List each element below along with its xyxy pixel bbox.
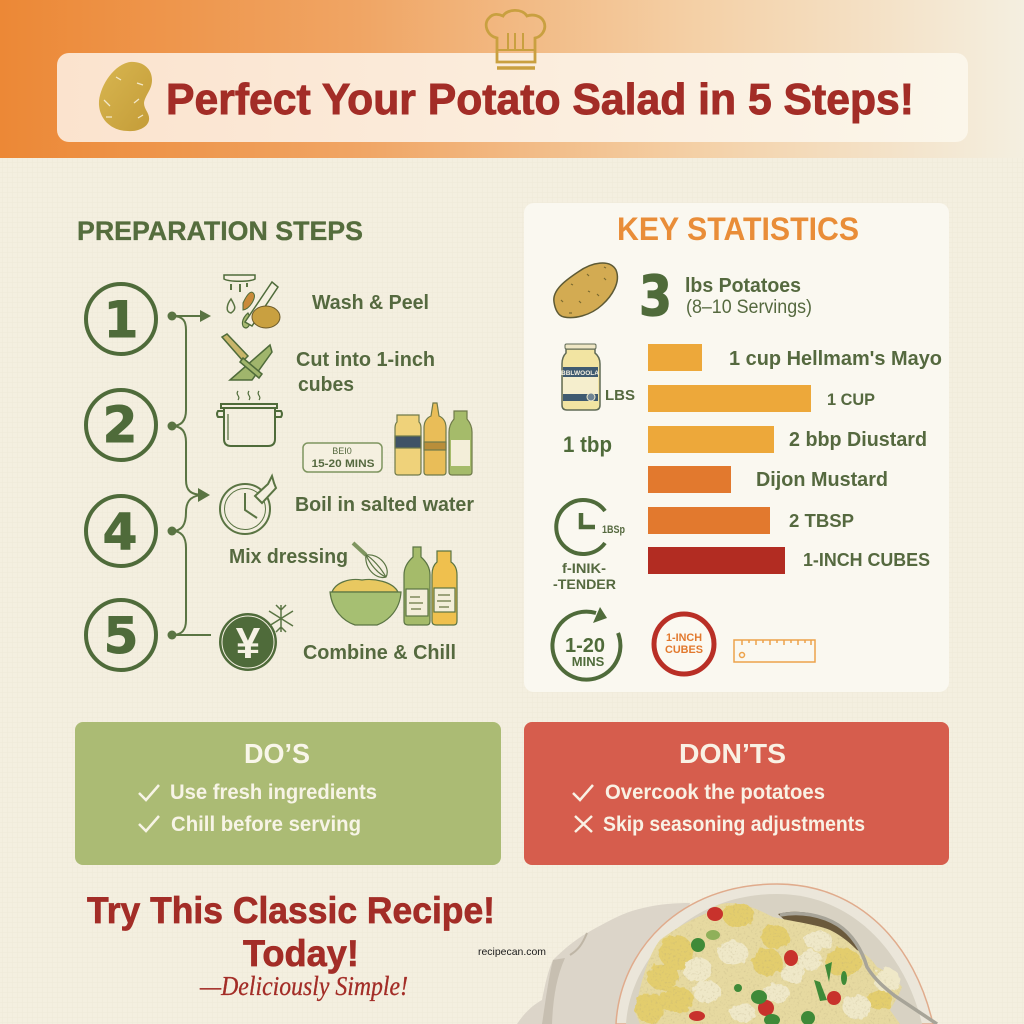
- step number 2: [86, 390, 156, 460]
- step number 1: [86, 284, 156, 354]
- spoon: [780, 913, 937, 1024]
- icon: chill: ¥: [236, 619, 261, 668]
- connector arrows: [168, 310, 211, 640]
- icon: chef hat: [486, 10, 545, 68]
- salad: [630, 900, 910, 1024]
- icon: timer: [220, 476, 276, 534]
- panel: key statistics: [524, 203, 949, 692]
- icon: cube size badge: 1-INCH: [666, 632, 702, 644]
- step number 1: 1: [104, 291, 138, 349]
- tagline: —Deliciously Simple!: [199, 971, 408, 1001]
- list: do's: Chill before serving: [171, 813, 361, 836]
- label: mix dressing: Mix dressing: [229, 546, 348, 568]
- list: do's: [139, 781, 377, 836]
- statistic: potatoes: 3: [639, 264, 672, 328]
- icon: time loop: [552, 607, 620, 680]
- bar chart: 1-INCH CUBES: [803, 550, 930, 570]
- statistic: potatoes: (8–10 Servings): [686, 297, 812, 318]
- list: don'ts: Skip seasoning adjustments: [603, 813, 865, 836]
- step number 5: 5: [104, 607, 138, 665]
- icon: chill: [219, 605, 293, 671]
- title banner: [57, 53, 968, 142]
- step number 4: [86, 496, 156, 566]
- label: cut into cubes: Cut into 1-inch: [296, 349, 435, 371]
- label: fork tender: f-INIK-: [562, 560, 606, 576]
- step number 2: 2: [103, 396, 137, 454]
- source credit: recipecan.com: [478, 946, 546, 958]
- badge: boil time: BEI0: [332, 446, 352, 456]
- label: 1 tbp: 1 tbp: [563, 432, 612, 457]
- bar chart: 2 TBSP: [789, 511, 854, 531]
- label: lbs: LBS: [605, 387, 635, 404]
- label: boil in salted water: Boil in salted water: [295, 494, 474, 516]
- icon: knife: [222, 334, 272, 380]
- icon: whole potato: [554, 263, 617, 318]
- call to action: [87, 890, 495, 974]
- header band: [0, 0, 1024, 158]
- list: do's: Use fresh ingredients: [170, 781, 377, 804]
- panel: preparation steps: [86, 275, 474, 671]
- call to action: Try This Classic Recipe!: [87, 890, 495, 931]
- label: wash and peel: Wash & Peel: [312, 292, 429, 314]
- label: combine and chill: Combine & Chill: [303, 642, 456, 664]
- bowl: [616, 884, 933, 1024]
- panel: do's: [75, 722, 501, 865]
- bar chart: Dijon Mustard: [756, 469, 888, 491]
- step number 5: [86, 600, 156, 670]
- heading: key statistics: KEY STATISTICS: [617, 211, 859, 247]
- statistic: potatoes: lbs Potatoes: [685, 275, 801, 297]
- icon: clock: [556, 500, 625, 554]
- icon: clock: 1BSp: [602, 524, 625, 536]
- badge: boil time: 15-20 MINS: [312, 458, 374, 470]
- call to action: Today!: [243, 933, 359, 974]
- icon: dressing jars: [395, 403, 472, 475]
- title: Perfect Your Potato Salad in 5 Steps!: [166, 75, 914, 124]
- icon: pot: [217, 391, 282, 446]
- icon: wash and peel: [224, 275, 280, 328]
- list: don'ts: Overcook the potatoes: [605, 781, 825, 804]
- icon: cube size badge: [654, 614, 714, 674]
- icon: mayo jar: [561, 344, 600, 410]
- step number 4: 4: [103, 503, 137, 561]
- label: fork tender: -TENDER: [553, 576, 616, 592]
- bar chart: 1 cup Hellmam's Mayo: [729, 348, 942, 370]
- statistic: potatoes: [639, 264, 812, 328]
- bar chart: [648, 344, 942, 574]
- label: cut into cubes: cubes: [298, 374, 354, 396]
- bar chart: 1 CUP: [827, 390, 875, 409]
- icon: potato: [99, 62, 152, 131]
- icon: cube size badge: CUBES: [665, 644, 703, 656]
- napkin: [517, 903, 690, 1024]
- heading: do's: DO’S: [244, 738, 310, 769]
- icon: time loop: 1-20: [565, 635, 605, 657]
- bar chart: 2 bbp Diustard: [789, 429, 927, 451]
- photo: potato salad bowl: [517, 884, 937, 1024]
- icon: time loop: MINS: [572, 654, 605, 669]
- heading: don'ts: DON’TS: [679, 738, 786, 769]
- icon: whisk, bowl and bottles: [330, 543, 457, 625]
- heading: preparation steps: PREPARATION STEPS: [77, 216, 363, 246]
- icon: ruler: [734, 640, 815, 662]
- icon: mayo jar: BBLWOOLA: [561, 370, 599, 377]
- panel: don'ts: [524, 722, 949, 865]
- list: don'ts: [573, 781, 865, 836]
- badge: boil time: [303, 443, 382, 472]
